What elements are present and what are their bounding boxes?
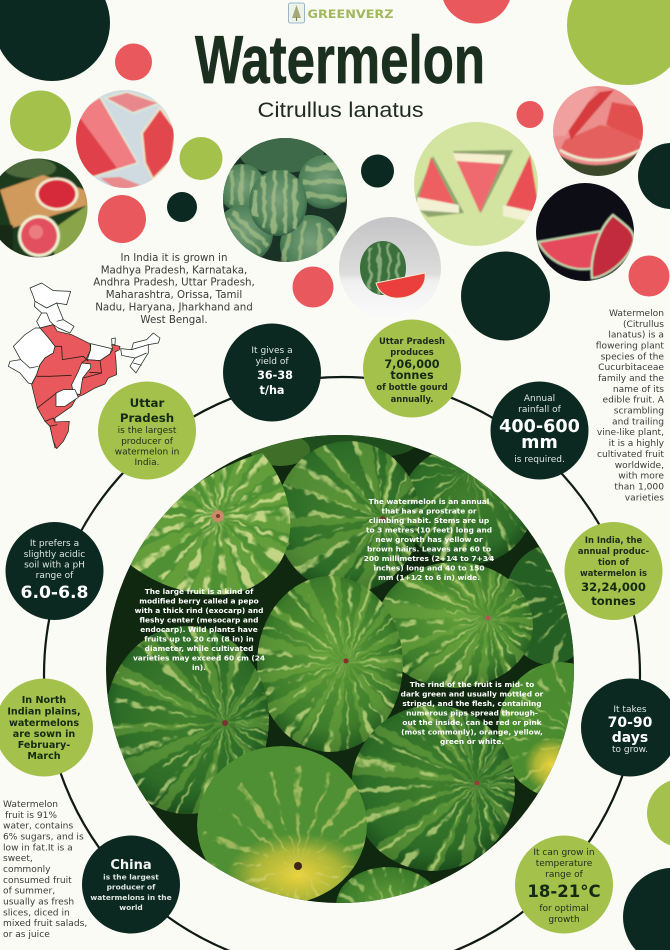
text: nutrition: of summer, <box>3 887 55 897</box>
text: nutrition: water, contains <box>3 822 73 832</box>
text: about watermelon: family and the <box>598 374 664 384</box>
node: China: is the largest <box>103 872 159 882</box>
node: soil pH: It prefers a <box>30 539 79 549</box>
node: annual production: watermelon is <box>580 568 647 578</box>
photo: chopped watermelon <box>553 86 643 176</box>
text: large fruit: modified berry called a pepo <box>139 596 259 606</box>
title: Watermelon <box>195 22 485 98</box>
text: large fruit: diameter, while cultivated <box>145 644 253 653</box>
text: annual habit: to 3 metres (10 feet) long and <box>366 526 492 534</box>
node: annual production: tion of <box>598 557 629 567</box>
text: nutrition: consumed fruit <box>3 876 72 886</box>
text: nutrition: or as juice <box>3 930 50 940</box>
photo: slices on black <box>536 183 634 281</box>
text: grown in India: West Bengal. <box>140 314 208 326</box>
node: rainfall: mm <box>521 433 558 453</box>
node: yield: It gives a <box>251 346 293 356</box>
node: temperature: growth <box>548 915 580 925</box>
text: about watermelon: Watermelon <box>609 309 664 319</box>
text: grown in India: Andhra Pradesh, Uttar Pradesh, <box>93 276 255 288</box>
node: days to grow: It takes <box>613 705 647 715</box>
text: about watermelon <box>596 309 665 503</box>
main watermelon photo <box>106 435 574 903</box>
node: annual production: 32,24,000 <box>581 580 646 594</box>
text: nutrition: fruit is 91% <box>5 811 57 821</box>
text: about watermelon: flowering plant <box>596 342 664 352</box>
text: about watermelon: (Citrullus <box>623 320 664 330</box>
node: soil pH: 6.0-6.8 <box>20 583 89 603</box>
node: Uttar Pradesh tonnes: tonnes <box>390 369 434 382</box>
node: rainfall <box>490 382 588 480</box>
node: days to grow: 70-90 <box>608 715 653 731</box>
node: Uttar Pradesh largest producer: Pradesh <box>120 411 174 425</box>
logo: Greenverz: GREENVERZ <box>308 7 394 21</box>
text: about watermelon: Cucurbitaceae <box>598 363 664 373</box>
node: China <box>82 836 180 934</box>
melon: bottom left <box>197 746 367 900</box>
text: grown in India: Nadu, Haryana, Jharkhand and <box>95 302 253 314</box>
text: large fruit: varieties may exceed 60 cm (24 <box>133 654 265 662</box>
node: China: watermelons in the <box>90 893 172 902</box>
text: large fruit: fruits up to 20 cm (8 in) in <box>144 634 254 644</box>
text: grown in India: Maharashtra, Orissa, Tamil <box>106 289 242 301</box>
text: about watermelon: cultivated fruit <box>597 450 664 460</box>
node: Uttar Pradesh largest producer: watermelon in <box>115 448 179 458</box>
node: North Indian plains: watermelons <box>9 718 79 729</box>
node: China: world <box>119 903 143 912</box>
melon: top sliver <box>250 438 310 466</box>
text: nutrition: usually as fresh <box>3 898 74 908</box>
node: soil pH: range of <box>36 571 74 581</box>
text: annual habit: brown hairs. Leaves are 60 to <box>367 544 491 554</box>
text: rind: striped, and the flesh, containing <box>402 699 542 708</box>
node: Uttar Pradesh tonnes: produces <box>390 347 434 357</box>
text: about watermelon: worldwide, <box>615 461 664 471</box>
map of India <box>8 283 160 449</box>
text: about watermelon: scrambling <box>614 407 664 417</box>
text: annual habit <box>364 497 494 582</box>
text: about watermelon: edible fruit. A <box>603 396 665 406</box>
melon: top back <box>302 435 414 456</box>
node: Uttar Pradesh largest producer: Uttar <box>130 396 164 410</box>
node: Uttar Pradesh tonnes: of bottle gourd <box>376 382 448 392</box>
node: China: China <box>110 858 152 873</box>
text: nutrition: 6% sugars, and is <box>3 832 84 842</box>
node: North Indian plains: In North <box>22 695 66 706</box>
photo: halved watermelons on board <box>0 158 88 258</box>
node: yield <box>223 324 321 422</box>
text: grown in India <box>93 252 255 326</box>
node: Uttar Pradesh tonnes: Uttar Pradesh <box>379 336 445 346</box>
node: temperature: It can grow in <box>533 848 595 858</box>
text: nutrition: Watermelon <box>3 800 58 810</box>
melon: top middle <box>282 441 420 590</box>
melon: right upper <box>508 546 574 664</box>
text: rind: green or white. <box>440 737 504 746</box>
node: North Indian plains: are sown in <box>13 729 75 740</box>
text: about watermelon: varieties <box>625 493 664 503</box>
node: Uttar Pradesh largest producer: India. <box>135 458 159 468</box>
node: yield: yield of <box>255 357 289 367</box>
logo: Greenverz <box>288 3 394 23</box>
node: rainfall: is required. <box>514 455 565 465</box>
node: annual production <box>564 522 662 620</box>
text: about watermelon: vine-like plant, <box>597 428 664 438</box>
text: rind <box>401 680 544 746</box>
text: nutrition: slices, diced in <box>3 908 70 918</box>
node: North Indian plains: February- <box>18 740 70 751</box>
text: grown in India: Madhya Pradesh, Karnataka, <box>101 264 247 276</box>
node: Uttar Pradesh largest producer: is the largest <box>118 426 177 436</box>
node: days to grow: days <box>612 730 648 746</box>
text: annual habit: inches) long and 40 to 150 <box>373 564 485 572</box>
text: nutrition: mixed fruit salads, <box>3 919 87 929</box>
node: rainfall: 400-600 <box>499 417 580 437</box>
node: annual production: annual produc- <box>578 546 650 556</box>
text: rind: dark green and usually mottled or <box>401 690 544 698</box>
ring connector <box>44 377 640 950</box>
node: yield: 36-38 <box>257 369 293 382</box>
text: grown in India: In India it is grown in <box>120 252 228 264</box>
text: rind: The rind of the fruit is mid- to <box>410 680 534 689</box>
melon: top right <box>409 454 528 564</box>
node: days to grow <box>581 678 670 776</box>
node: temperature <box>515 836 613 934</box>
node: temperature: temperature <box>536 859 593 869</box>
text: about watermelon: than 1,000 <box>614 482 664 492</box>
text: large fruit <box>133 587 265 672</box>
text: rind: (most commonly), orange, yellow, <box>401 728 543 736</box>
text: rind: numerous pips spread through- <box>406 708 538 718</box>
node: Uttar Pradesh tonnes <box>363 320 461 418</box>
node: annual production: In India, the <box>585 535 642 545</box>
subtitle: Citrullus lanatus <box>258 99 424 122</box>
text: large fruit: with a thick rind (exocarp) and <box>135 606 263 615</box>
photo: triangle slices on light green <box>414 122 538 246</box>
node: temperature: range of <box>545 870 584 880</box>
text: nutrition <box>3 800 87 940</box>
node: temperature: 18-21°C <box>527 882 601 901</box>
text: nutrition: commonly <box>3 865 51 875</box>
text: large fruit: fleshy center (mesocarp and <box>140 616 258 624</box>
melon: left <box>108 626 269 814</box>
text: nutrition: low in fat.It is a <box>3 843 73 853</box>
text: about watermelon: with more <box>618 472 664 482</box>
melon: bottom small <box>336 867 432 903</box>
node: soil pH <box>6 522 104 620</box>
melon: bottom center <box>352 705 515 871</box>
photo: whole melon and slice on white <box>339 217 441 299</box>
node: Uttar Pradesh largest producer: producer of <box>121 437 174 447</box>
text: annual habit: that has a prostrate or <box>381 506 477 516</box>
text: annual habit: climbing habit. Stems are up <box>369 516 489 525</box>
node: China: producer of <box>107 882 156 892</box>
text: about watermelon: it is a highly <box>609 439 665 449</box>
node: North Indian plains <box>0 678 93 776</box>
melon: top left <box>130 453 290 595</box>
node: Uttar Pradesh tonnes: 7,06,000 <box>384 358 440 371</box>
text: annual habit: new growth has yellow or <box>375 535 483 544</box>
node: days to grow: to grow. <box>612 745 648 755</box>
text: about watermelon: species of the <box>601 352 664 362</box>
melon: center <box>257 576 403 752</box>
node: temperature: for optimal <box>539 904 589 914</box>
text: annual habit: mm (1+1⁄2 to 6 in) wide. <box>378 573 480 582</box>
node: soil pH: slightly acidic <box>24 550 85 560</box>
photo: watermelon slices on plate <box>76 90 174 188</box>
node: yield: t/ha <box>260 384 284 397</box>
text: large fruit: endocarp). Wild plants have <box>140 625 258 634</box>
node: Uttar Pradesh tonnes: annually. <box>391 394 433 404</box>
text: large fruit: in). <box>192 663 206 672</box>
node: North Indian plains: March <box>27 751 61 762</box>
text: nutrition: sweet, <box>3 854 33 864</box>
photo: pile of watermelons <box>223 138 347 262</box>
node: Uttar Pradesh largest producer <box>98 382 196 480</box>
text: annual habit: The watermelon is an annual <box>369 497 489 506</box>
node: rainfall: rainfall of <box>518 405 562 415</box>
text: annual habit: 200 millimetres (2+1⁄4 to 7+3⁄4 <box>364 554 494 563</box>
text: large fruit: The large fruit is a kind of <box>145 587 254 596</box>
text: about watermelon: lanatus) is a <box>608 331 664 341</box>
node: annual production: tonnes <box>591 594 636 608</box>
text: about watermelon: name of its <box>613 385 664 395</box>
node: rainfall: Annual <box>524 394 555 404</box>
node: soil pH: soil with a pH <box>24 560 85 570</box>
melon: mid right <box>382 562 533 688</box>
melon: right lower <box>498 662 574 794</box>
text: rind: out the inside, can be red or pink <box>402 718 543 727</box>
node: North Indian plains: Indian plains, <box>7 706 81 718</box>
text: about watermelon: and trailing <box>612 417 664 427</box>
